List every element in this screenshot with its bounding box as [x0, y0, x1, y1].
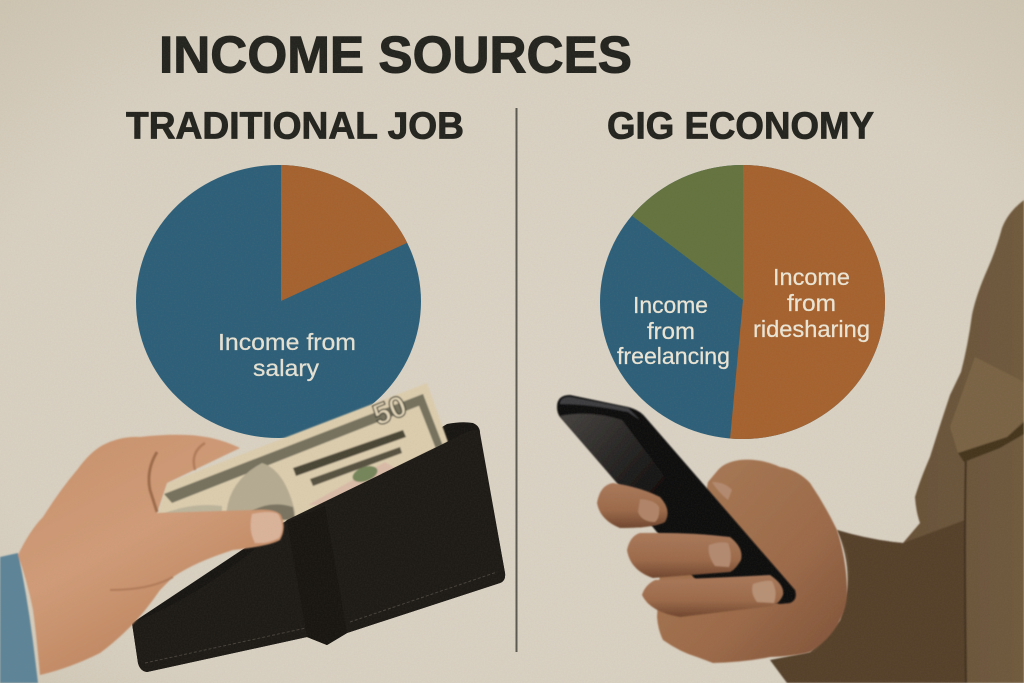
slice: orange segment [281, 165, 408, 301]
index nail [638, 499, 659, 522]
phone screen [560, 414, 705, 575]
slice: green segment [632, 165, 743, 300]
label: income from ridesharing: ridesharing [753, 316, 870, 342]
bill inner printing [293, 430, 406, 476]
finger creases [149, 452, 157, 512]
label: income from ridesharing [753, 264, 870, 342]
wallet front [132, 430, 505, 672]
label: income from freelancing: from [647, 318, 695, 344]
thumb crease shadow [110, 577, 173, 590]
ring nail [752, 581, 776, 603]
thumb nail [712, 482, 732, 500]
title: INCOME SOURCES [159, 26, 632, 84]
thumbnail [251, 512, 282, 543]
wallet fold [287, 506, 347, 645]
wallet back [132, 422, 505, 672]
label: income from ridesharing: Income [773, 264, 850, 290]
right hand palm [657, 460, 847, 663]
index finger [597, 483, 668, 528]
flap shadow [958, 422, 1024, 462]
jacket cuff [775, 520, 965, 683]
bill denomination: 50 [368, 389, 412, 432]
heading: traditional job: TRADITIONAL JOB [126, 106, 464, 148]
phone highlight [560, 397, 640, 420]
jacket pocket flap [950, 357, 1024, 453]
label: income from ridesharing: from [787, 290, 836, 316]
seal and red details [308, 462, 395, 505]
smartphone [557, 395, 796, 604]
jacket seam [965, 455, 966, 683]
left hand with sleeve [0, 435, 284, 683]
label: income from salary: Income from [218, 329, 356, 355]
wallet with cash [132, 383, 505, 672]
jacket arm [770, 200, 1024, 683]
label: income from freelancing [617, 292, 730, 369]
center divider [516, 108, 518, 652]
label: income from freelancing: Income [633, 292, 708, 318]
sleeve [0, 553, 38, 683]
banknotes [157, 383, 448, 522]
middle nail [709, 542, 731, 567]
label: income from freelancing: freelancing [617, 343, 730, 369]
slice: ridesharing [730, 165, 885, 439]
pie chart: traditional job [136, 165, 421, 438]
pie chart: gig economy [600, 165, 885, 439]
hand and thumb [18, 435, 284, 675]
right hand fingers [597, 482, 783, 617]
portrait [226, 463, 295, 520]
heading: gig economy: GIG ECONOMY [607, 106, 874, 148]
ring finger [642, 575, 783, 617]
pie chart: traditional job: salary [253, 355, 320, 381]
middle finger [627, 533, 742, 578]
wallet stitching [145, 572, 497, 663]
bill top border [164, 394, 426, 503]
